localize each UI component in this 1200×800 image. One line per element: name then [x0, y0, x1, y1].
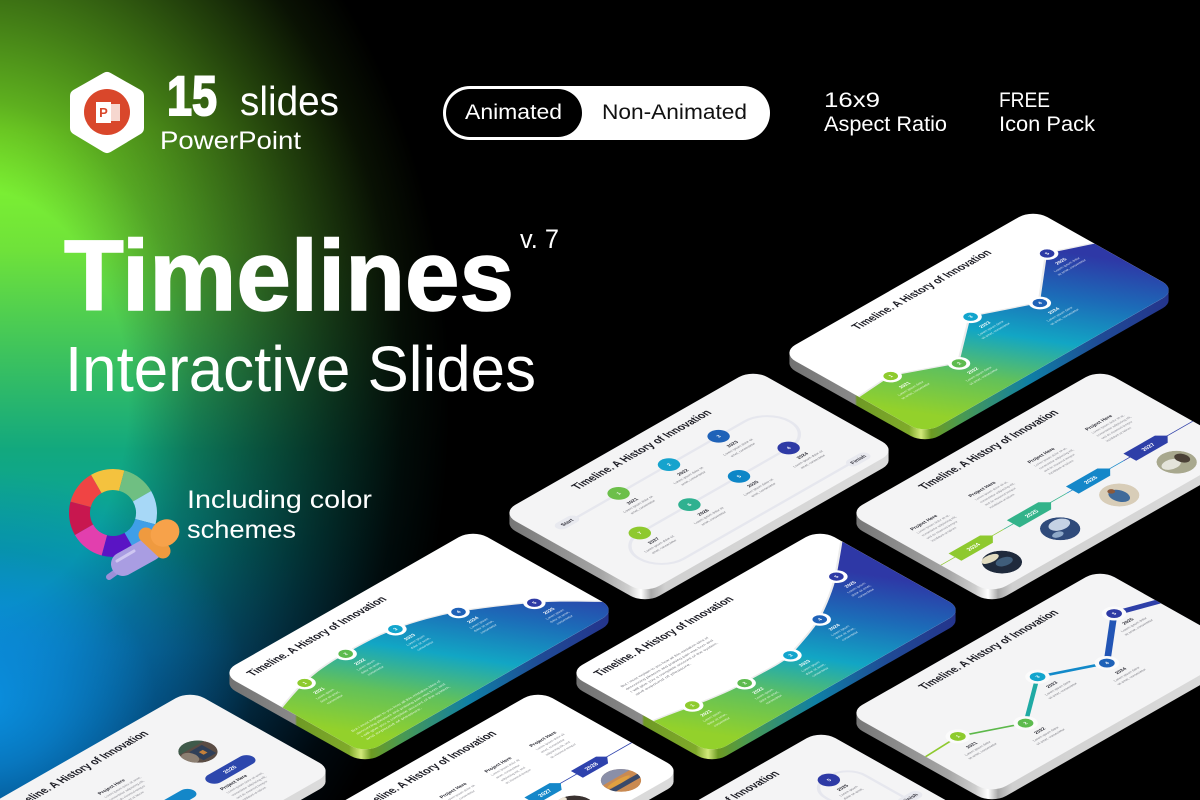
- slide: centre curved path timeline: amet, consectetur: [629, 499, 657, 515]
- slide: centre curved path timeline: Start: [560, 518, 576, 527]
- slide: bottom-right line timeline: sit amet, consectetur: [967, 742, 999, 760]
- title: Timelines: Timelines: [64, 220, 514, 332]
- slide: right project timeline: Lorem ipsum dolor sit at,: [1033, 447, 1068, 467]
- slide: centre concave area timeline: Lorem ipsum: [754, 688, 775, 700]
- slide: bottom curved path: 5: [826, 778, 834, 783]
- caption: including color schemes: [187, 486, 372, 544]
- slide: centre curved path timeline: 2022: [676, 468, 691, 477]
- slide: centre concave area timeline: dolor sit amet,: [850, 584, 872, 597]
- slide: centre curved path timeline: 5: [736, 474, 744, 479]
- slide: right project timeline: Lorem ipsum dolor sit at,: [974, 481, 1009, 501]
- toggle pill: Animated / Non-Animated: Animated: [465, 101, 562, 124]
- caption: including color schemes: schemes: [187, 516, 296, 544]
- slide: top-right zigzag area timeline: 2024: [1047, 307, 1062, 315]
- slide: bottom-right line timeline: Timeline. A History of Innovation: [915, 608, 1062, 692]
- slide: bottom-left pill timeline: consectetur adipiscing elit,: [230, 775, 268, 797]
- slide: bottom-left pill timeline: sed do eiusmod tempor: [235, 780, 269, 799]
- slide: bottom-left pill timeline: Project Here: [219, 774, 250, 791]
- slide: bottom-centre project timeline: do eiusmod tempor: [549, 742, 578, 759]
- slide: top-right zigzag area timeline: Lorem ipsum dolor: [1053, 256, 1082, 273]
- slide: top-right zigzag area timeline: Timeline. A History of Innovation: [848, 248, 995, 332]
- slide: centre concave area timeline: 1: [689, 703, 697, 708]
- slide: top-right zigzag area timeline: 5: [1044, 252, 1052, 256]
- slide: top-right zigzag area timeline: Lorem ipsum dolor: [897, 380, 926, 397]
- slide: bottom-right line timeline: Lorem ipsum dolor: [1120, 616, 1149, 633]
- slide: right project timeline: sed do eiusmod tempor: [1100, 420, 1134, 440]
- slide: bottom curved path: dolor sit amet,: [842, 788, 865, 800]
- slide: top-right zigzag area timeline: sit amet, consectetur: [968, 368, 1000, 386]
- slide: centre curved path timeline: 4: [785, 446, 793, 450]
- slide: left hill area timeline: Lorem ipsum: [356, 659, 377, 671]
- slide: centre concave area timeline: and expound of pleasure.: [634, 662, 693, 696]
- slide: left hill area timeline: consectetur: [555, 614, 575, 625]
- slide: centre curved path timeline: amet, consectetur: [700, 510, 728, 526]
- slide: centre curved path timeline: Lorem ipsum dolor sit: [643, 535, 675, 553]
- slide: left hill area timeline: 5: [531, 601, 539, 605]
- slide: centre curved path timeline: Lorem ipsum dolor sit: [622, 495, 654, 514]
- slide: right project timeline: Lorem ipsum dolor sit at,: [916, 514, 951, 534]
- slide: right project timeline: consectetur adipiscing elit,: [1095, 416, 1133, 437]
- slide: centre curved path timeline: 7: [637, 531, 644, 536]
- slide: bottom-right line timeline: 4: [1104, 661, 1111, 666]
- slide: right project timeline: [848, 369, 1200, 604]
- slide: centre concave area timeline: dolor sit amet,: [758, 690, 780, 703]
- slide: left hill area timeline: 4: [455, 610, 463, 614]
- slide: centre concave area timeline: consectetur: [712, 716, 732, 727]
- icon: PowerPoint hexagon: P: [99, 105, 108, 120]
- slide: top-right zigzag area timeline: sit amet, consectetur: [1049, 308, 1081, 326]
- slide: right project timeline: Project Here: [909, 514, 940, 532]
- slide: centre curved path timeline: Finish: [849, 454, 869, 465]
- slide: centre curved path timeline: Lorem ipsum dolor sit: [743, 478, 775, 496]
- subtitle: Interactive Slides: [65, 333, 536, 405]
- slide: left hill area timeline: Timeline. A History of Innovation: [243, 594, 390, 678]
- slide: bottom-right line timeline: sit amet, consectetur: [1047, 682, 1079, 700]
- slide: left hill area timeline: 2023: [403, 633, 418, 642]
- feature: aspect ratio: Aspect Ratio: [824, 113, 947, 136]
- slide: left hill area timeline: consectetur: [416, 640, 436, 651]
- slide: centre concave area timeline: Lorem ipsum: [702, 711, 723, 723]
- slide: left hill area timeline: 3: [392, 627, 400, 632]
- slide: bottom-right line timeline: 1: [955, 734, 962, 739]
- slide: bottom-centre project timeline: 2027: [537, 788, 555, 798]
- slide: bottom-right line timeline: 2025: [1121, 617, 1136, 626]
- slide: bottom-centre project timeline: Project Here: [438, 782, 469, 799]
- slide: right project timeline: incididunt ut labore: [988, 493, 1016, 509]
- slide: centre concave area timeline: But I must explain to you how all this mistaken idea of: [620, 636, 710, 688]
- slide: top-right zigzag area timeline: 2: [956, 361, 964, 366]
- toggle pill: Animated / Non-Animated: [443, 86, 770, 140]
- slide: bottom-left pill timeline: Lorem ipsum dolor sit amet,: [225, 772, 265, 794]
- slide: left hill area timeline: dolor sit amet,: [319, 690, 341, 703]
- slide: left hill area timeline: consectetur: [366, 665, 386, 676]
- slide: centre concave area timeline: I will give you a complete account of the system,: [629, 642, 719, 693]
- slide: bottom-centre project timeline: amet, consectetur: [495, 764, 522, 779]
- slide: bottom-centre project timeline: adipiscing elit, sed: [544, 741, 572, 756]
- slide: top-right zigzag area timeline: 2021: [898, 381, 913, 390]
- slide: centre curved path timeline: 2021: [625, 497, 641, 506]
- slide: left hill area timeline: dolor sit amet,: [360, 662, 382, 674]
- slide: bottom-right line timeline: 2023: [1045, 681, 1060, 689]
- slide: centre curved path timeline: Lorem ipsum dolor sit: [673, 466, 705, 485]
- slide: bottom-right line timeline: 2024: [1114, 667, 1129, 675]
- slide: centre curved path timeline: 2023: [726, 440, 741, 449]
- slide: centre curved path timeline: amet, consectetur: [680, 470, 708, 486]
- slide: bottom-left pill timeline: Project Here: [97, 778, 128, 796]
- slide: left hill area timeline: Lorem ipsum: [469, 617, 489, 629]
- slide: right project timeline: consectetur adipiscing elit,: [1038, 448, 1075, 470]
- slide: top-right zigzag area timeline: [781, 209, 1177, 444]
- slide: bottom-right line timeline: 3: [1034, 675, 1042, 679]
- slide: centre concave area timeline: 2022: [751, 687, 766, 695]
- slide: bottom-right line timeline: Lorem ipsum dolor: [1044, 680, 1073, 696]
- toggle pill: Animated / Non-Animated: Non-Animated: [602, 101, 747, 124]
- slide: centre concave area timeline: consectetur: [811, 666, 831, 677]
- slide: bottom curved path: [569, 730, 965, 800]
- feature: aspect ratio: 16x9: [824, 89, 880, 112]
- slide: left hill area timeline: consectetur: [325, 694, 345, 705]
- slide: bottom-centre project timeline: Project Here: [483, 756, 514, 774]
- slide: right project timeline: consectetur adipiscing elit,: [920, 515, 958, 537]
- slide: bottom curved path: Lorem ipsum: [838, 785, 859, 797]
- slide: centre concave area timeline: denouncing pleasure and praising pain was born and: [624, 639, 715, 691]
- slide: centre concave area timeline: 2: [741, 681, 749, 686]
- slide: top-right zigzag area timeline: Lorem ipsum dolor: [1046, 306, 1075, 322]
- slide: bottom-centre project timeline: [346, 694, 674, 800]
- slide: left hill area timeline: 2021: [312, 687, 327, 695]
- slide: right project timeline: Lorem ipsum dolor sit at,: [1090, 414, 1126, 434]
- icon: color wheel with dropper: [79, 480, 185, 577]
- slide: left hill area timeline: Lorem ipsum: [405, 635, 426, 646]
- feature: icon pack: Icon Pack: [999, 113, 1096, 136]
- slide: centre curved path timeline: amet, consectetur: [750, 482, 778, 498]
- slide: right project timeline: sed do eiusmod tempor: [983, 487, 1018, 506]
- slide: bottom-right line timeline: sit amet, consectetur: [1035, 728, 1067, 746]
- slide: top-right zigzag area timeline: 3: [967, 315, 975, 319]
- slide: top-right zigzag area timeline: sit amet, consectetur: [980, 322, 1012, 340]
- slide: centre curved path timeline: Lorem ipsum dolor sit: [722, 438, 754, 456]
- slide: centre curved path timeline: Lorem ipsum dolor sit: [792, 450, 824, 468]
- slide: left hill area timeline: 1: [301, 681, 309, 685]
- slide: bottom-right line timeline: [848, 569, 1200, 800]
- slide: bottom-left pill timeline: [0, 690, 334, 800]
- slide: centre concave area timeline: 3: [787, 653, 795, 658]
- slides word: slides: [240, 78, 339, 124]
- slide: right project timeline: Project Here: [1026, 447, 1057, 464]
- slide: bottom-left pill timeline: 2026: [222, 765, 240, 775]
- slide: right project timeline: consectetur adipiscing elit,: [979, 482, 1016, 504]
- slide: right project timeline: 2025: [1024, 509, 1041, 519]
- slide: centre curved path timeline: 2: [666, 463, 674, 467]
- slide: left hill area timeline: Lorem ipsum: [315, 688, 336, 700]
- slide: left hill area timeline: dolor sit amet,: [473, 620, 495, 632]
- slide: bottom-centre project timeline: amet, consectetur: [539, 738, 567, 753]
- slide: centre curved path timeline: amet, consectetur: [651, 539, 678, 554]
- PowerPoint label: PowerPoint: [160, 127, 301, 155]
- slide: right project timeline: 2027: [1141, 442, 1158, 452]
- slide: top-right zigzag area timeline: 1: [887, 374, 895, 379]
- slide: centre concave area timeline: consectetur: [857, 588, 876, 599]
- feature: icon pack: FREE: [999, 89, 1050, 112]
- slide: bottom-right line timeline: Lorem ipsum dolor: [964, 740, 993, 757]
- slide: right project timeline: 2024: [966, 542, 983, 552]
- slide: bottom-right line timeline: Lorem ipsum dolor: [1032, 726, 1061, 742]
- slide: centre concave area timeline: 2023: [798, 659, 813, 668]
- slide: top-right zigzag area timeline: 2025: [1054, 257, 1069, 266]
- feature: aspect ratio: [824, 89, 947, 136]
- slide: right project timeline: incididunt ut labore: [1105, 426, 1133, 442]
- slide: centre concave area timeline: 5: [833, 575, 841, 579]
- slide: left hill area timeline: dolor sit amet,: [549, 611, 571, 623]
- slide: left hill area timeline: But I must explain to you how all this mistaken idea of: [350, 680, 442, 732]
- slide: top-right zigzag area timeline: Lorem ipsum dolor: [977, 320, 1006, 336]
- slide: left hill area timeline: and expound of pleasure.: [365, 707, 423, 741]
- slide: centre curved path timeline: 2025: [746, 480, 761, 489]
- slide: centre concave area timeline: 4: [816, 617, 824, 622]
- slide: right project timeline: sed do eiusmod tempor: [925, 520, 960, 540]
- slide: top-right zigzag area timeline: 4: [1037, 301, 1044, 306]
- slide: bottom-right line timeline: 2022: [1033, 727, 1048, 735]
- slide: right project timeline: Project Here: [1084, 414, 1115, 432]
- slide: bottom-centre project timeline: Lorem ipsum dolor sit: [535, 733, 566, 751]
- slide: centre concave area timeline: 2025: [843, 580, 858, 589]
- slide: right project timeline: Project Here: [967, 481, 998, 498]
- version: v. 7: [520, 224, 559, 254]
- slide: left hill area timeline: 2024: [466, 616, 481, 625]
- slide: bottom-right line timeline: 2021: [965, 741, 980, 750]
- slide: bottom-left pill timeline: Lorem ipsum dolor sit amet,: [103, 776, 142, 798]
- slide: centre concave area timeline: 2021: [699, 709, 714, 718]
- slide: centre curved path timeline: 2027: [647, 537, 662, 545]
- slide: bottom-right line timeline: sit amet, consectetur: [1123, 618, 1155, 636]
- slide: top-right zigzag area timeline: sit amet, consectetur: [1056, 258, 1088, 276]
- slide count: 15: [167, 64, 217, 127]
- slide: centre curved path timeline: amet, consectetur: [799, 453, 827, 469]
- icon: PowerPoint hexagon: [77, 79, 137, 146]
- slide: bottom-centre project timeline: 2028: [584, 762, 601, 772]
- slide: bottom curved path: 2025: [836, 784, 851, 792]
- slide: bottom-centre project timeline: Lorem ipsum dolor sit: [490, 759, 521, 776]
- slide: top-right zigzag area timeline: 2022: [966, 367, 981, 375]
- slide: centre concave area timeline: dolor sit amet,: [804, 663, 827, 676]
- slide: centre curved path timeline: 2024: [796, 452, 811, 460]
- slide: top-right zigzag area timeline: 2023: [978, 321, 993, 329]
- slide: centre concave area timeline: dolor sit amet,: [706, 713, 728, 726]
- slide: left hill area timeline: denouncing pleasure and praising pain was born and: [355, 683, 447, 735]
- slide: right project timeline: 2026: [1083, 475, 1100, 485]
- slide: top-right zigzag area timeline: sit amet, consectetur: [900, 382, 932, 400]
- slide: left hill area timeline: 2: [342, 652, 350, 656]
- slide: centre concave area timeline: Timeline. A History of Innovation: [590, 594, 737, 678]
- slide: centre concave area timeline: consectetur: [764, 694, 784, 705]
- slide: left hill area timeline: dolor sit amet,: [409, 637, 432, 650]
- slide: bottom-right line timeline: sit amet, consectetur: [1116, 668, 1148, 686]
- slide: centre curved path timeline: 2026: [696, 508, 711, 517]
- slide: bottom-centre project timeline: adipiscing elit, sed: [499, 766, 527, 782]
- slide: right project timeline: sed do eiusmod tempor: [1042, 453, 1077, 473]
- slide: left hill area timeline: Lorem ipsum: [545, 608, 566, 620]
- caption: including color schemes: Including color: [187, 486, 372, 514]
- slide: right project timeline: incididunt ut labore: [1047, 459, 1075, 475]
- slide: centre concave area timeline: Lorem ipsum: [846, 582, 867, 594]
- slide: bottom-right line timeline: Lorem ipsum dolor: [1113, 666, 1142, 682]
- slide: left hill area timeline: [221, 529, 617, 764]
- slide: right project timeline: Timeline. A History of Innovation: [915, 408, 1062, 492]
- badge: 15 slides PowerPoint: [77, 64, 339, 155]
- slide: centre concave area timeline: 2024: [827, 623, 842, 632]
- slide: left hill area timeline: I will give you a complete account of the system,: [360, 685, 451, 738]
- slide: top-right zigzag area timeline: Lorem ipsum dolor: [965, 366, 994, 382]
- slide: centre curved path timeline: amet, consectetur: [729, 442, 757, 458]
- slide: bottom-right line timeline: 5: [1111, 612, 1119, 616]
- feature: icon pack: [999, 89, 1096, 136]
- slide: left hill area timeline: 2022: [353, 658, 368, 666]
- slide: centre concave area timeline: [568, 529, 964, 764]
- slide: bottom-right line timeline: 2: [1022, 721, 1030, 726]
- slide: centre curved path timeline: [501, 369, 897, 604]
- slide: centre concave area timeline: Lorem ipsum: [800, 661, 821, 673]
- slide: left hill area timeline: consectetur: [479, 623, 499, 634]
- slide: centre curved path timeline: 6: [686, 503, 694, 507]
- slide: centre concave area timeline: dolor sit amet,: [834, 627, 856, 640]
- slide: centre concave area timeline: consectetur: [841, 630, 860, 641]
- slide: centre curved path timeline: Lorem ipsum dolor sit: [693, 507, 725, 525]
- slide: centre concave area timeline: Lorem ipsum: [830, 625, 851, 637]
- slide: bottom-centre project timeline: do eiusmod tempor: [504, 768, 533, 785]
- slide: centre curved path timeline: 1: [615, 491, 623, 496]
- slide: centre curved path timeline: Timeline. A History of Innovation: [568, 408, 715, 492]
- slide: left hill area timeline: 2025: [542, 607, 557, 616]
- slide: right project timeline: incididunt ut labore: [930, 526, 958, 542]
- slide: bottom-centre project timeline: Project Here: [528, 731, 559, 748]
- slide: centre curved path timeline: 3: [715, 434, 723, 439]
